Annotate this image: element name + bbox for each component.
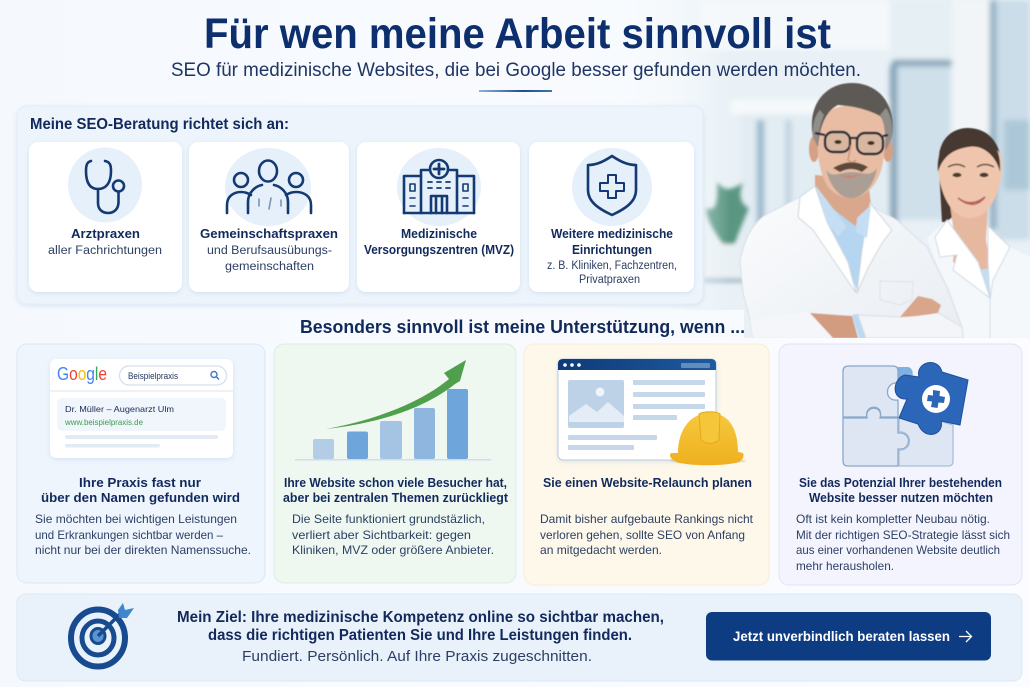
- icon: stethoscope: [86, 161, 124, 213]
- illustration: Google search mockup: www.beispielpraxis.de: [64, 418, 144, 427]
- card: MVZ: Versorgungszentren (MVZ): [364, 243, 514, 257]
- card: Potenzial nutzen: Sie das Potenzial Ihrer bestehenden: [799, 475, 1002, 490]
- card: Praxis nur über Namen gefunden: nicht nur bei der direkten Namenssuche.: [35, 543, 251, 557]
- card: Potenzial nutzen: mehr herausholen.: [796, 559, 894, 573]
- photo: male doctor: [740, 83, 963, 338]
- folded arms: [750, 320, 832, 338]
- card: Weitere Einrichtungen: Weitere medizinische: [551, 227, 673, 241]
- card: Praxis nur über Namen gefunden: und Erkrankungen sichtbar werden –: [35, 528, 223, 542]
- card: Potenzial nutzen: Oft ist kein kompletter Neubau nötig.: [796, 512, 990, 526]
- card: Arztpraxen: aller Fachrichtungen: [48, 245, 162, 257]
- illustration: Google search mockup: Google: [57, 364, 107, 384]
- card: Relaunch: Sie einen Website-Relaunch planen: [543, 475, 752, 490]
- card: Weitere Einrichtungen: Einrichtungen: [572, 243, 652, 257]
- card: viele Besucher: Die Seite funktioniert grundstäzlich,: [292, 512, 485, 526]
- card: viele Besucher: aber bei zentralen Themen zurückliegt: [283, 490, 509, 505]
- subtitle: SEO für medizinische Websites, die bei Google besser gefunden werden möchten.: [171, 60, 861, 81]
- card: Arztpraxen: [29, 142, 182, 292]
- photo: blurred clinic background: [691, 0, 1030, 338]
- card: Praxis nur über Namen gefunden: über den Namen gefunden wird: [41, 490, 240, 505]
- card: viele Besucher: [274, 344, 516, 583]
- icon: hard hat: [670, 412, 746, 465]
- title: Für wen meine Arbeit sinnvoll ist: [204, 10, 831, 58]
- panel heading: Meine SEO-Beratung richtet sich an:: [30, 116, 289, 133]
- illustration: browser with hard hat: [558, 359, 746, 465]
- card: Gemeinschaftspraxen: Gemeinschaftspraxen: [200, 227, 338, 241]
- banner: goal and call to action: Fundiert. Persönlich. Auf Ihre Praxis zugeschnitten.: [242, 648, 592, 665]
- card: Relaunch: verloren gehen, sollte SEO von Anfang: [540, 528, 745, 542]
- card: Praxis nur über Namen gefunden: Sie möchten bei wichtigen Leistungen: [35, 512, 237, 526]
- card: Relaunch: an mitgedacht werden.: [540, 543, 662, 557]
- card: Potenzial nutzen: aus einer vorhandenen Website deutlich: [796, 543, 1000, 557]
- card: Weitere Einrichtungen: [529, 142, 694, 292]
- glasses: [825, 132, 850, 152]
- photo: doctors in clinic: [691, 0, 1030, 338]
- illustration: Google search mockup: [50, 359, 233, 458]
- card: Potenzial nutzen: Website besser nutzen möchten: [809, 490, 993, 505]
- hair: [812, 83, 893, 150]
- card: Arztpraxen: Arztpraxen: [71, 227, 140, 241]
- card: Gemeinschaftspraxen: [189, 142, 349, 292]
- banner: goal and call to action: [17, 594, 1022, 681]
- photo: female doctor: [927, 128, 1030, 338]
- icon: hospital building: [404, 160, 474, 213]
- card: Relaunch: Damit bisher aufgebaute Rankings nicht: [540, 512, 754, 526]
- bar chart with growth arrow: [295, 360, 491, 460]
- illustration: Google search mockup: Beispielpraxis: [128, 371, 178, 381]
- card: Potenzial nutzen: Mit der richtigen SEO-Strategie lässt sich: [796, 528, 1010, 542]
- card: viele Besucher: verliert aber Sichtbarkeit: gegen: [292, 528, 471, 542]
- face: [817, 105, 885, 198]
- illustration: Google search mockup: Dr. Müller – Augenarzt Ulm: [65, 404, 174, 414]
- card: Potenzial nutzen: [779, 344, 1022, 585]
- card: MVZ: [357, 142, 520, 292]
- arrow: growth: [326, 360, 466, 429]
- card: Praxis nur über Namen gefunden: Ihre Praxis fast nur: [79, 475, 201, 490]
- illustration: puzzle pieces: [843, 363, 968, 466]
- banner: goal and call to action: dass die richtigen Patienten Sie und Ihre Leistungen finden.: [208, 627, 632, 644]
- card: Gemeinschaftspraxen: und Berufsausübungs-: [207, 245, 332, 257]
- card: Weitere Einrichtungen: z. B. Kliniken, Fachzentren,: [547, 260, 677, 272]
- panel: target audience: [17, 106, 703, 304]
- card: Weitere Einrichtungen: Privatpraxen: [579, 274, 640, 286]
- section heading: Besonders sinnvoll ist meine Unterstützung, wenn ...: [300, 317, 745, 337]
- card: viele Besucher: Ihre Website schon viele Besucher hat,: [284, 475, 507, 490]
- icon: shield with cross: [588, 156, 636, 215]
- icon: team: [227, 160, 311, 213]
- ears: [809, 136, 819, 162]
- button: Jetzt unverbindlich beraten lassen: [733, 628, 950, 644]
- card: Relaunch: [524, 344, 769, 585]
- banner: goal and call to action: Mein Ziel: Ihre medizinische Kompetenz online so sichtbar machen,: [177, 609, 664, 626]
- card: MVZ: Medizinische: [401, 227, 477, 241]
- button: [706, 612, 991, 660]
- icon: target with arrow: [71, 603, 134, 666]
- card: Gemeinschaftspraxen: gemeinschaften: [225, 261, 314, 273]
- photo: potted plant: [704, 182, 750, 283]
- card: Praxis nur über Namen gefunden: [17, 344, 265, 583]
- card: viele Besucher: Kliniken, MVZ oder größere Anbieter.: [292, 543, 494, 557]
